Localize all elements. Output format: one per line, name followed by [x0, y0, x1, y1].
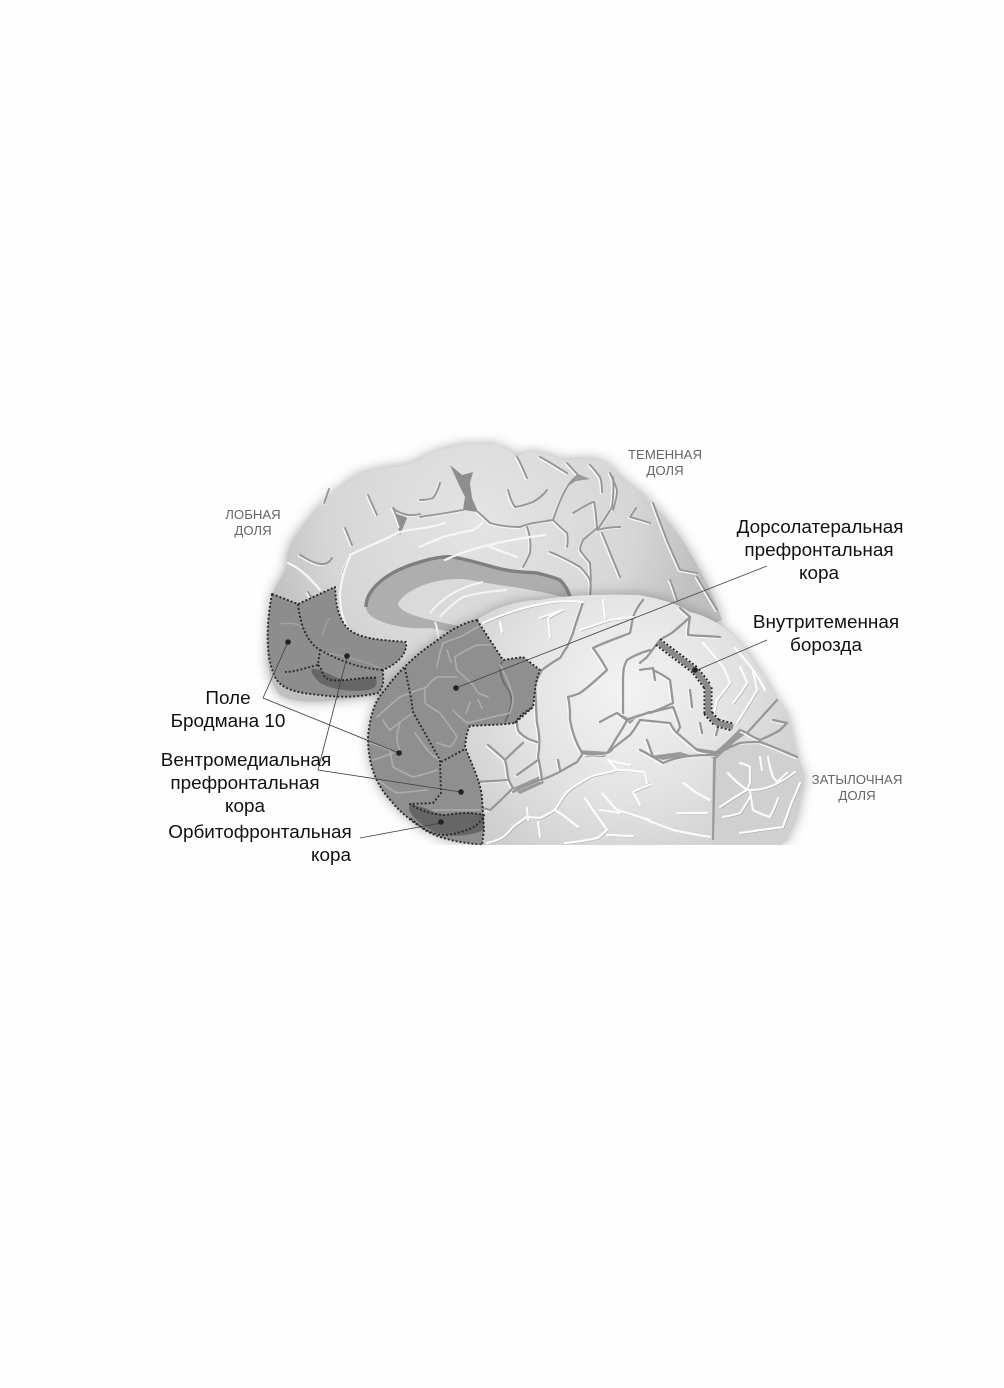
- label: parietal lobe: ТЕМЕННАЯ: [628, 447, 702, 462]
- label: ventromedial prefrontal cortex: Вентромедиальная: [161, 750, 331, 771]
- label: dorsolateral prefrontal cortex: префронтальная: [744, 540, 894, 561]
- label: ventromedial prefrontal cortex: префронтальная: [170, 773, 320, 794]
- front brain: gyri and sulci: [477, 600, 801, 844]
- label: parietal lobe: ДОЛЯ: [646, 463, 684, 478]
- front brain: intraparietal sulcus: [658, 642, 733, 727]
- illustration: medial brain hemisphere: [267, 444, 722, 705]
- front brain: sulcus junction shading: [513, 712, 747, 840]
- label: occipital lobe: ДОЛЯ: [838, 788, 876, 803]
- label: orbitofrontal cortex: Орбитофронтальная: [168, 822, 352, 843]
- label: intraparietal sulcus: борозда: [790, 635, 862, 656]
- label: orbitofrontal cortex: кора: [311, 845, 351, 866]
- label: Brodmann area 10: Бродмана 10: [171, 711, 285, 732]
- front brain: shaded prefrontal region: [368, 620, 540, 845]
- label: frontal lobe: ДОЛЯ: [234, 523, 272, 538]
- leader lines: [263, 566, 767, 838]
- back brain: gyri and sulci: [288, 457, 717, 643]
- label: occipital lobe: ЗАТЫЛОЧНАЯ: [812, 772, 902, 787]
- back brain: shaded prefrontal region: [268, 587, 406, 697]
- back brain: corpus callosum: [366, 557, 570, 652]
- label: ventromedial prefrontal cortex: кора: [225, 796, 265, 817]
- label: dorsolateral prefrontal cortex: Дорсолатеральная: [737, 517, 903, 538]
- illustration: lateral brain hemisphere: [368, 595, 805, 845]
- label: intraparietal sulcus: Внутритеменная: [753, 612, 899, 633]
- label: Brodmann area 10: Поле: [205, 688, 251, 709]
- label: frontal lobe: ЛОБНАЯ: [225, 507, 281, 522]
- front brain: occipital lobe shading: [715, 744, 766, 812]
- leader dots: [285, 639, 698, 825]
- label: dorsolateral prefrontal cortex: кора: [799, 563, 839, 584]
